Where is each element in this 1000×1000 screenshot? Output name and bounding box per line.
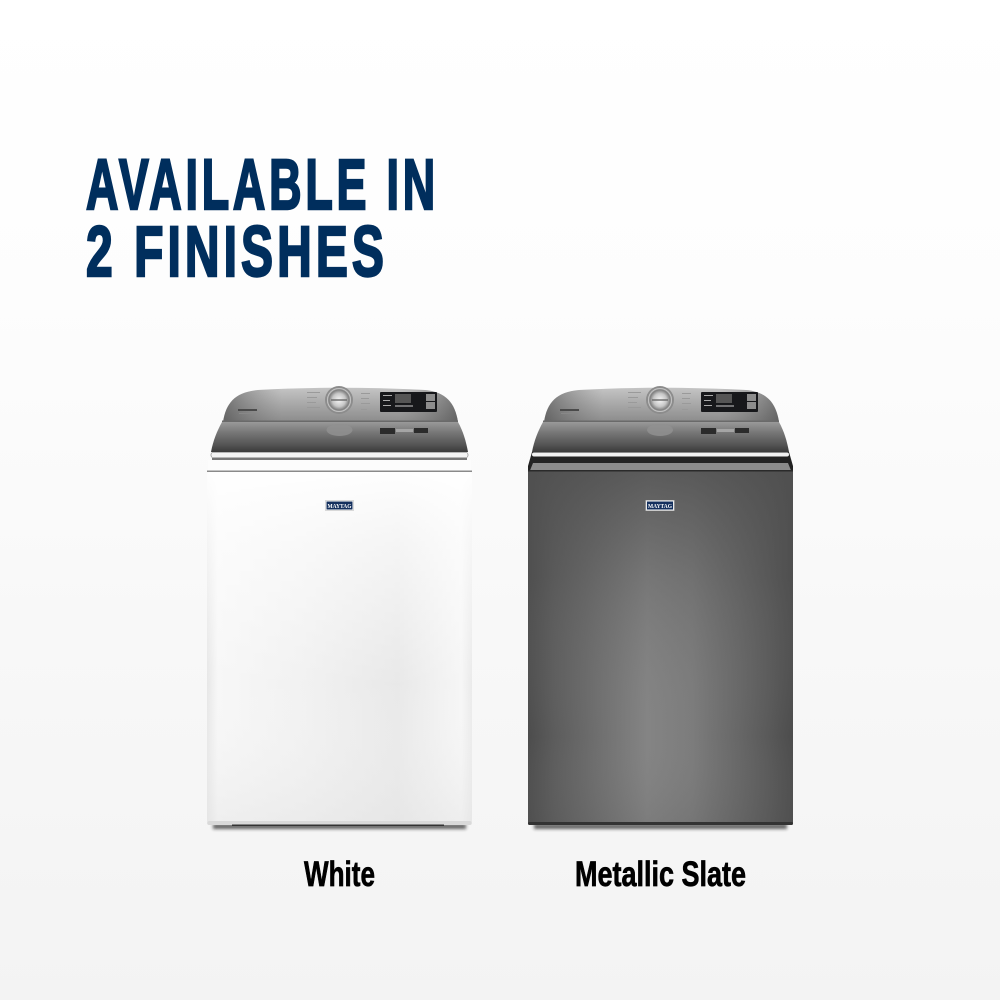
dial reflection bbox=[647, 424, 673, 436]
maytag badge: MAYTAG bbox=[328, 503, 352, 510]
dial bbox=[646, 386, 674, 414]
cabinet body bbox=[207, 472, 472, 826]
cabinet body bbox=[528, 470, 793, 825]
dark side edge bbox=[528, 452, 793, 470]
chrome strip bbox=[211, 452, 468, 458]
title bbox=[86, 146, 439, 292]
label: white: White bbox=[304, 855, 375, 894]
top band bbox=[208, 460, 471, 471]
maytag badge: MAYTAG bbox=[648, 503, 672, 510]
panel reflection bbox=[701, 428, 716, 434]
dial bbox=[325, 386, 353, 414]
console bbox=[528, 386, 793, 472]
brand mark bbox=[560, 409, 579, 411]
maytag badge bbox=[326, 500, 354, 510]
title: AVAILABLE IN bbox=[86, 146, 439, 225]
maytag badge bbox=[646, 500, 674, 510]
panel reflection bbox=[380, 428, 395, 434]
washer: white finish bbox=[207, 386, 472, 829]
console bbox=[211, 386, 468, 460]
control legend text bbox=[628, 392, 691, 413]
washer: metallic slate finish bbox=[528, 386, 793, 829]
floor shadow bbox=[534, 824, 787, 829]
display panel bbox=[701, 392, 758, 412]
chrome strip bbox=[532, 452, 789, 456]
label: metallic slate: Metallic Slate bbox=[575, 855, 746, 894]
title: 2 FINISHES bbox=[86, 213, 388, 292]
control legend text bbox=[307, 392, 370, 413]
display panel bbox=[380, 392, 437, 412]
floor shadow bbox=[213, 824, 466, 829]
brand mark bbox=[238, 409, 257, 411]
grey lip bbox=[530, 463, 791, 470]
dial reflection bbox=[326, 424, 352, 436]
